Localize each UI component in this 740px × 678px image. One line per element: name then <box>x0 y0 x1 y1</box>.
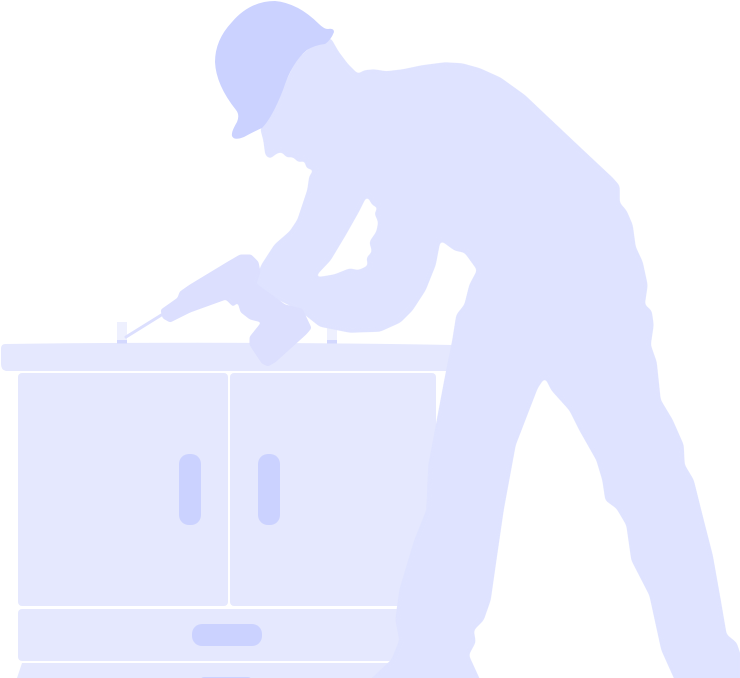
power drill <box>161 255 311 366</box>
cabinet <box>1 343 453 678</box>
right cabinet door <box>230 373 436 606</box>
lower drawer <box>17 663 400 678</box>
left cabinet door <box>18 373 228 606</box>
upper drawer <box>18 609 408 661</box>
drill bit <box>126 314 163 337</box>
lower drawer handle <box>200 677 252 678</box>
left screw <box>117 322 127 344</box>
upper drawer handle <box>192 624 262 646</box>
worker hard hat <box>215 1 334 139</box>
worker body silhouette <box>255 38 740 678</box>
left door handle <box>179 454 201 525</box>
right door handle <box>258 454 280 525</box>
cabinet countertop <box>1 343 453 371</box>
right screw <box>327 328 337 344</box>
